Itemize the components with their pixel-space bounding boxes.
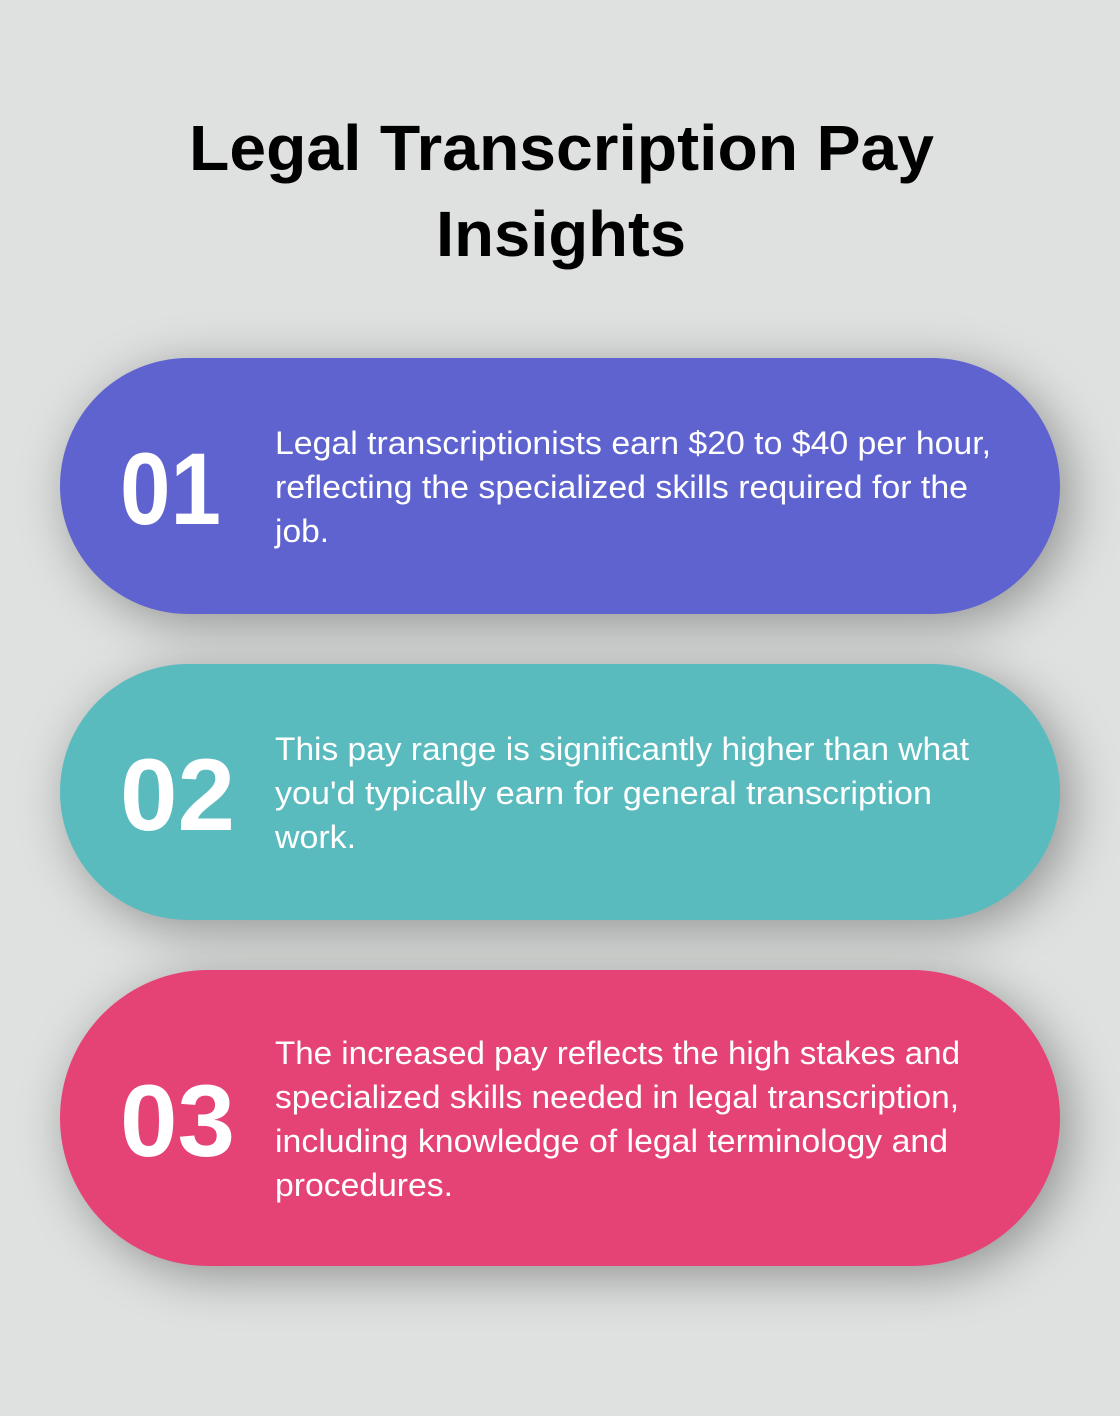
text block: insight 01	[274, 425, 991, 549]
text block: insight 03: procedures.	[275, 1167, 453, 1203]
text block: insight 03: The increased pay reflects the high stakes and	[275, 1035, 960, 1071]
text block: insight 03: specialized skills needed in legal transcription,	[275, 1079, 959, 1115]
text block: insight 03: including knowledge of legal terminology and	[275, 1123, 948, 1159]
title: Legal Transcription Pay	[189, 112, 934, 184]
number 03: 03	[120, 1064, 235, 1178]
text block: insight 01: Legal transcriptionists earn $20 to $40 per hour,	[275, 425, 991, 461]
title: Insights	[436, 198, 686, 270]
number 02: 02	[120, 738, 235, 852]
panel: pill 01 background	[60, 358, 1060, 614]
text block: insight 02	[274, 731, 969, 855]
number 01: 01	[120, 432, 221, 546]
text block: insight 02: This pay range is significantly higher than what	[275, 731, 969, 767]
text block: insight 01: reflecting the specialized skills required for the	[275, 469, 968, 505]
panel: pill 03 background	[60, 970, 1060, 1266]
title	[189, 112, 934, 270]
text block: insight 02: work.	[274, 819, 356, 855]
text block: insight 01: job.	[274, 513, 329, 549]
text block: insight 03	[275, 1035, 960, 1203]
panel: pill 02 background	[60, 664, 1060, 920]
text block: insight 02: you'd typically earn for general transcription	[275, 775, 932, 811]
